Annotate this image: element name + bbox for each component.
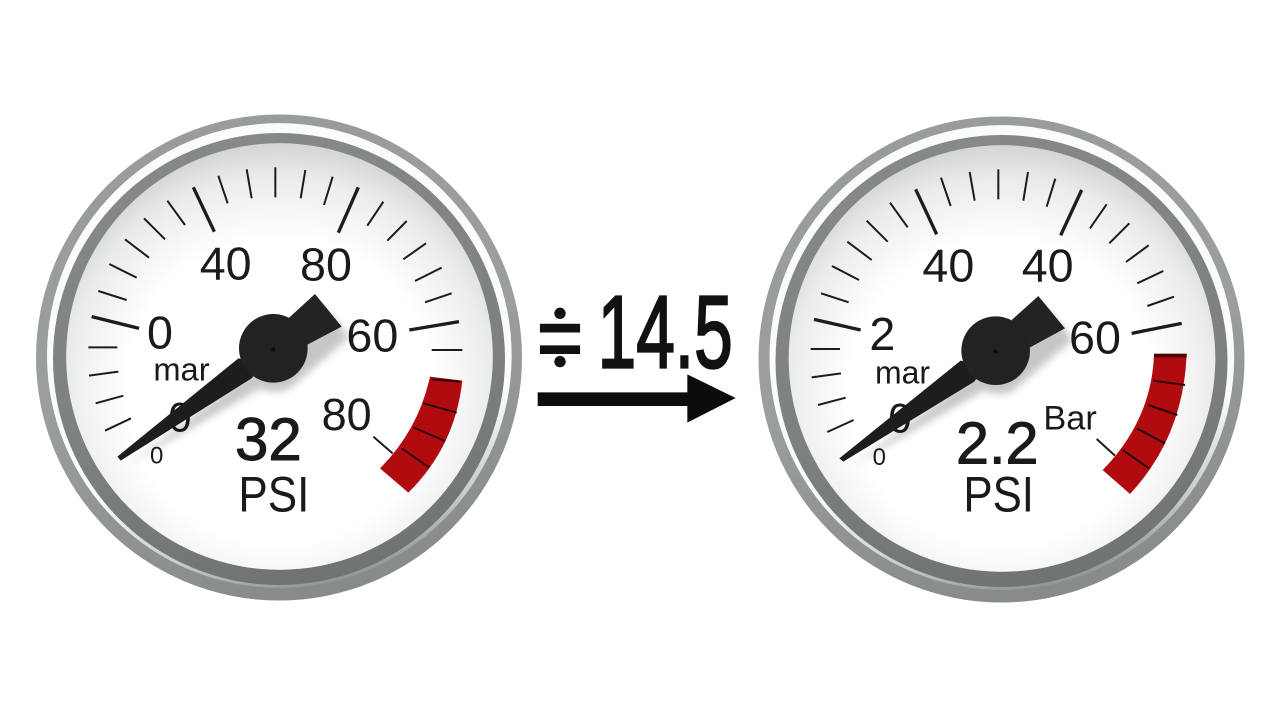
conversion factor: 14.5 [598, 273, 733, 389]
scale numbers: mar [153, 351, 210, 388]
scale numbers: 0 [873, 444, 886, 471]
scale numbers: 40 [922, 240, 974, 292]
bar unit label: Bar [1043, 399, 1097, 437]
scale numbers: 40 [200, 237, 252, 289]
needle [839, 296, 1065, 462]
gauge dial face [789, 145, 1215, 572]
scale numbers: 2 [869, 308, 895, 360]
gauge dial face [66, 143, 493, 570]
scale numbers: 0 [168, 394, 192, 441]
scale tick marks [811, 169, 1182, 456]
unit label: PSI [963, 467, 1034, 523]
scale numbers [147, 237, 398, 469]
scale numbers: 0 [150, 442, 163, 469]
red zone [1103, 354, 1187, 494]
needle [117, 294, 342, 461]
scale numbers: 60 [346, 310, 398, 362]
scale numbers: 80 [300, 239, 352, 291]
arrow [538, 374, 736, 423]
scale numbers: 40 [1022, 240, 1074, 292]
scale numbers [869, 240, 1121, 471]
needle shadow [130, 307, 350, 463]
red zone [380, 377, 462, 493]
scale tick marks [88, 167, 462, 453]
scale numbers: 0 [888, 395, 912, 442]
gauge bezel [758, 116, 1244, 602]
scale numbers: mar [875, 354, 930, 390]
needle shadow [853, 309, 1073, 465]
pressure reading: 2.2 [956, 409, 1038, 476]
conversion factor and arrow [537, 273, 736, 423]
gauge: 32 PSI [36, 114, 522, 600]
gauge bezel [36, 114, 522, 600]
pressure reading: 32 [235, 406, 302, 473]
unit label: PSI [238, 467, 309, 523]
scale numbers: 80 [322, 389, 372, 440]
scale numbers: 60 [1069, 311, 1121, 363]
division sign: = [537, 293, 583, 382]
gauge: 2.2 bar equivalent [758, 116, 1244, 602]
scale numbers: 0 [147, 306, 173, 358]
